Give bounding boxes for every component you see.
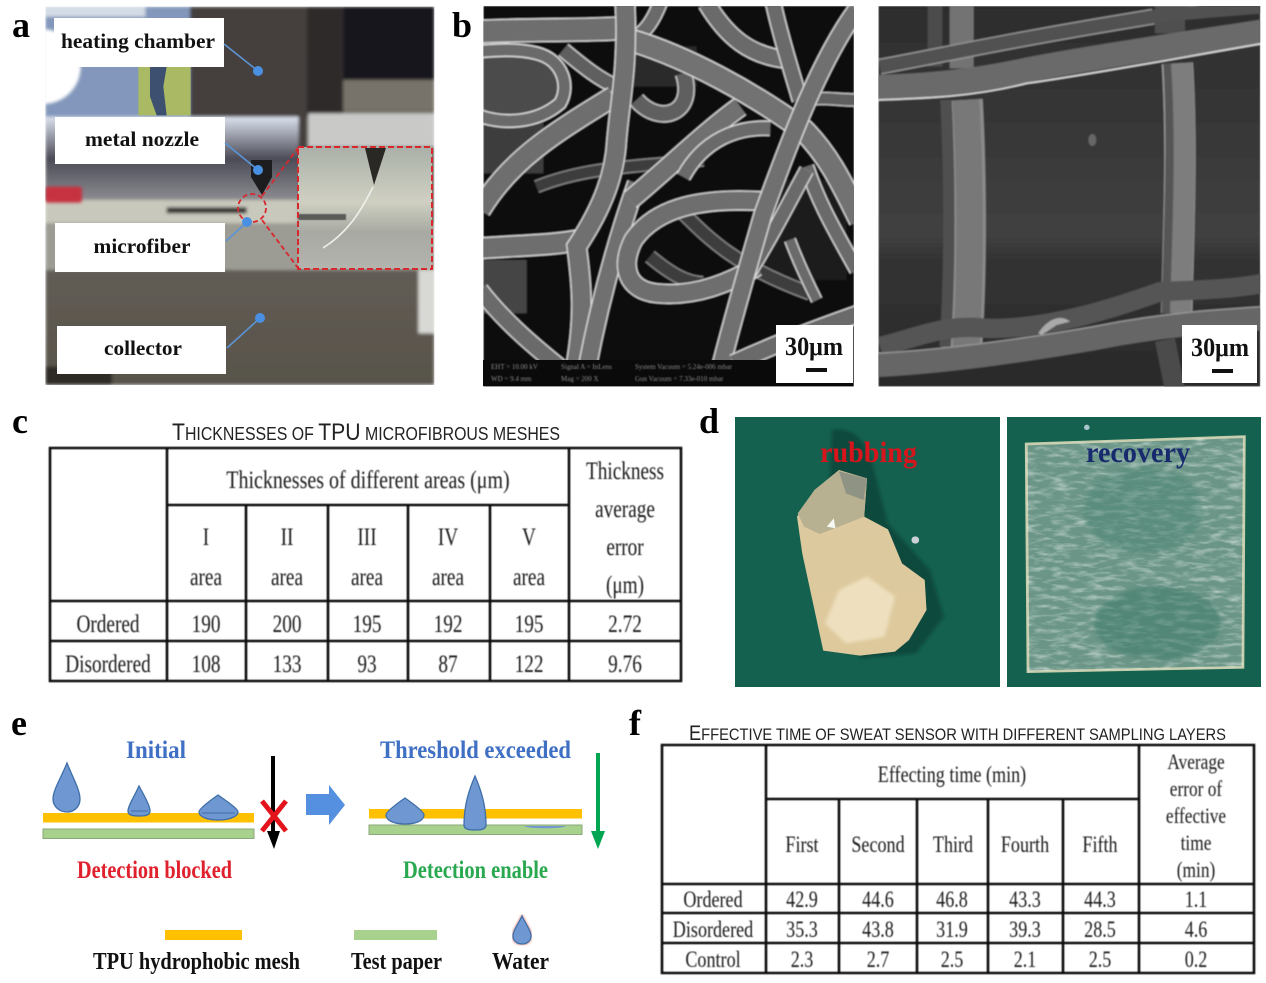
legend: water bbox=[492, 916, 549, 975]
legend: test paper: Test paper bbox=[351, 949, 442, 975]
table f row: disordered: 43.8 bbox=[862, 916, 894, 943]
panel b left: disordered fibers SEM bbox=[477, 3, 860, 387]
table f error header: time bbox=[1181, 831, 1211, 856]
instrument data strip: EHT = 10.00 kV bbox=[491, 363, 538, 371]
table c error header: (μm) bbox=[606, 571, 644, 599]
enable arrow bbox=[591, 753, 605, 849]
table f row: disordered: 28.5 bbox=[1084, 916, 1116, 943]
table c row: ordered: 190 bbox=[192, 610, 220, 638]
table c row: ordered: 195 bbox=[515, 610, 543, 638]
threshold exceeded state bbox=[369, 737, 582, 884]
legend: mesh bbox=[93, 930, 300, 975]
table f row: disordered: 35.3 bbox=[786, 916, 818, 943]
callout: collector bbox=[57, 313, 265, 374]
crumpled mesh bbox=[797, 429, 944, 658]
table c row: disordered: Disordered bbox=[65, 650, 151, 678]
table c error header: Thickness bbox=[586, 457, 664, 485]
table c title: THICKNESSES OF TPU MICROFIBROUS MESHES bbox=[172, 419, 560, 446]
table c area headers: III bbox=[357, 523, 377, 551]
recovered mesh bbox=[1026, 425, 1244, 672]
table f row: ordered: 44.6 bbox=[862, 886, 894, 913]
callout: metal nozzle bbox=[55, 117, 263, 175]
table f row: ordered: Ordered bbox=[683, 886, 743, 913]
table c row: disordered: 93 bbox=[357, 650, 377, 678]
table c row: ordered: Ordered bbox=[76, 610, 140, 638]
table c row: ordered: 192 bbox=[434, 610, 462, 638]
panel e: detection schematic bbox=[43, 737, 605, 975]
photo background bbox=[6, 7, 434, 385]
initial state: Detection blocked bbox=[77, 857, 232, 884]
table f trial headers: First bbox=[785, 831, 819, 858]
label a: a bbox=[12, 5, 30, 45]
callout: heating chamber bbox=[54, 18, 263, 76]
legend: test paper bbox=[351, 930, 442, 975]
label b: b bbox=[452, 5, 472, 45]
table f row: disordered: 31.9 bbox=[936, 916, 968, 943]
label e: e bbox=[11, 703, 27, 743]
instrument data strip: Signal A = InLens bbox=[561, 363, 612, 371]
table f error header bbox=[1166, 750, 1226, 883]
table f trial headers: Second bbox=[851, 831, 905, 858]
panel d left: rubbing photo bbox=[735, 417, 1000, 687]
table c row: ordered bbox=[76, 610, 642, 638]
initial state bbox=[43, 737, 254, 884]
table f: effective time bbox=[662, 745, 1254, 973]
inset: zoomed nozzle and fiber bbox=[298, 147, 432, 269]
legend: mesh: TPU hydrophobic mesh bbox=[93, 949, 300, 975]
callout: microfiber: microfiber bbox=[94, 234, 190, 258]
table f row: control: Control bbox=[685, 946, 741, 973]
callout: collector: collector bbox=[104, 336, 182, 360]
table c area headers: area bbox=[351, 563, 383, 591]
table c row: disordered bbox=[65, 650, 642, 678]
table f row: control: 0.2 bbox=[1185, 946, 1207, 973]
legend: water: Water bbox=[492, 949, 549, 975]
table f row: ordered bbox=[683, 886, 1207, 913]
table c area headers: V bbox=[522, 523, 536, 551]
table f row: control: 2.5 bbox=[1089, 946, 1111, 973]
table f error header: error of bbox=[1170, 777, 1222, 802]
table f error header: Average bbox=[1167, 750, 1225, 775]
table f row: control bbox=[685, 946, 1207, 973]
scale bar: 30μm bbox=[1191, 333, 1249, 362]
table c row: ordered: 195 bbox=[353, 610, 381, 638]
table c row: disordered: 133 bbox=[273, 650, 301, 678]
callout: microfiber bbox=[55, 217, 252, 272]
instrument data strip: Gun Vacuum = 7.33e-010 mbar bbox=[635, 375, 724, 383]
table f trial headers: Fifth bbox=[1082, 831, 1118, 858]
table c area headers bbox=[190, 523, 545, 591]
table c error header: error bbox=[606, 533, 644, 561]
table f heading: Effecting time (min) bbox=[878, 761, 1026, 788]
scale bar bbox=[1182, 325, 1257, 383]
table c row: disordered: 9.76 bbox=[608, 650, 642, 678]
label f: f bbox=[629, 703, 642, 743]
table c error header: average bbox=[595, 495, 655, 523]
callout: heating chamber: heating chamber bbox=[61, 29, 215, 53]
table f row: ordered: 46.8 bbox=[936, 886, 968, 913]
table f row: ordered: 1.1 bbox=[1185, 886, 1207, 913]
table f row: control: 2.7 bbox=[867, 946, 889, 973]
table f row: control: 2.5 bbox=[941, 946, 963, 973]
table f error header: (min) bbox=[1177, 858, 1215, 883]
fiber network bbox=[477, 3, 860, 387]
table c row: disordered: 87 bbox=[438, 650, 458, 678]
panel d right: recovery photo bbox=[1007, 417, 1261, 687]
table f row: disordered: 4.6 bbox=[1185, 916, 1207, 943]
table c error header bbox=[586, 457, 664, 599]
table c area headers: I bbox=[203, 523, 209, 551]
table c heading: Thicknesses of different areas (μm) bbox=[226, 466, 510, 494]
nozzle bbox=[251, 160, 272, 195]
instrument data strip: System Vacuum = 5.24e-006 mbar bbox=[635, 363, 733, 371]
table f row: ordered: 42.9 bbox=[786, 886, 818, 913]
instrument data strip: Mag = 200 X bbox=[561, 375, 599, 383]
table f trial headers: Fourth bbox=[1001, 831, 1050, 858]
table c row: disordered: 122 bbox=[515, 650, 543, 678]
fiber grid bbox=[877, 6, 1263, 390]
table c row: ordered: 200 bbox=[273, 610, 301, 638]
scale bar bbox=[776, 325, 853, 383]
panel b right: ordered fibers SEM bbox=[877, 6, 1263, 390]
table c: thicknesses bbox=[50, 448, 681, 681]
transition arrow bbox=[306, 785, 345, 825]
recovery label: recovery bbox=[1086, 436, 1190, 469]
panel a: apparatus photo bbox=[6, 7, 434, 385]
table c row: disordered: 108 bbox=[192, 650, 220, 678]
instrument data strip: WD = 9.4 mm bbox=[491, 375, 532, 383]
instrument data strip bbox=[483, 360, 853, 386]
zoom guides bbox=[238, 148, 298, 268]
table c area headers: area bbox=[513, 563, 545, 591]
threshold exceeded state: Detection enable bbox=[403, 857, 548, 884]
table c grid bbox=[50, 448, 681, 681]
table c row: ordered: 2.72 bbox=[608, 610, 642, 638]
table c area headers: area bbox=[432, 563, 464, 591]
scale bar: 30μm bbox=[785, 332, 843, 361]
table f row: disordered: 39.3 bbox=[1009, 916, 1041, 943]
table f row: disordered: Disordered bbox=[673, 916, 754, 943]
table f error header: effective bbox=[1166, 804, 1226, 829]
table f row: ordered: 43.3 bbox=[1009, 886, 1041, 913]
table c area headers: II bbox=[281, 523, 293, 551]
rubbing label: rubbing bbox=[820, 436, 917, 469]
table f row: control: 2.3 bbox=[791, 946, 813, 973]
table f row: control: 2.1 bbox=[1014, 946, 1036, 973]
initial state: Initial bbox=[126, 737, 186, 764]
table f trial headers bbox=[785, 831, 1118, 858]
threshold exceeded state: Threshold exceeded bbox=[380, 737, 571, 764]
table c area headers: area bbox=[190, 563, 222, 591]
table f grid bbox=[662, 745, 1254, 973]
table c area headers: IV bbox=[438, 523, 458, 551]
callout: metal nozzle: metal nozzle bbox=[85, 127, 199, 151]
table f row: ordered: 44.3 bbox=[1084, 886, 1116, 913]
table f row: disordered bbox=[673, 916, 1207, 943]
blocked arrow bbox=[262, 756, 286, 849]
label d: d bbox=[699, 401, 719, 441]
label c: c bbox=[12, 401, 28, 441]
table c area headers: area bbox=[271, 563, 303, 591]
table f trial headers: Third bbox=[933, 831, 974, 858]
